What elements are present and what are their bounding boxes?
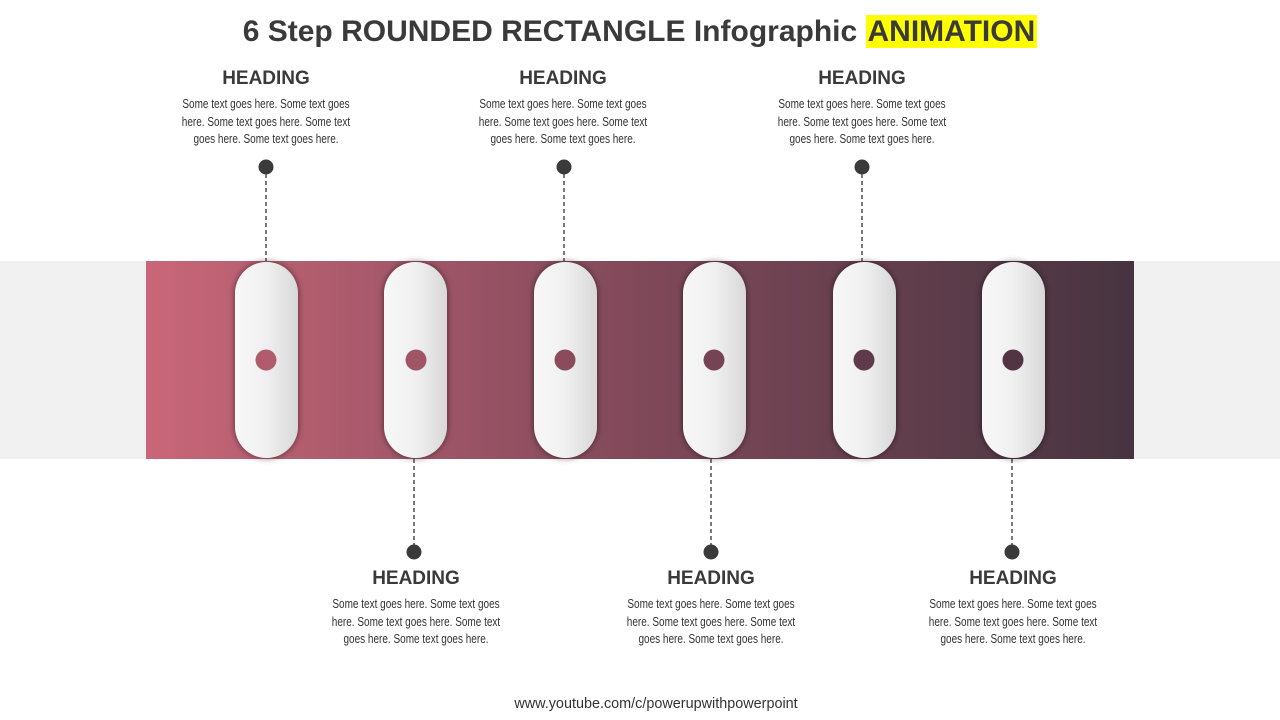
- text block 5: Some text goes here. Some text goes: [778, 97, 946, 111]
- pill 1: [235, 262, 298, 458]
- text block 4: here. Some text goes here. Some text: [627, 615, 795, 629]
- text block 3: HEADING: [519, 68, 607, 89]
- pill 5: [833, 262, 896, 458]
- text block 3: goes here. Some text goes here.: [490, 132, 636, 146]
- text block 1: Some text goes here. Some text goes: [182, 97, 350, 111]
- text block 1: HEADING: [222, 68, 310, 89]
- text block 4: goes here. Some text goes here.: [638, 632, 784, 646]
- footer url: www.youtube.com/c/powerupwithpowerpoint: [514, 695, 798, 712]
- text block 2: HEADING: [372, 568, 460, 589]
- text block 3: here. Some text goes here. Some text: [479, 115, 647, 129]
- pill 4: [683, 262, 746, 458]
- text block 6: goes here. Some text goes here.: [940, 632, 1086, 646]
- text block 1: [182, 68, 350, 146]
- text block 2: here. Some text goes here. Some text: [332, 615, 500, 629]
- text block 2: Some text goes here. Some text goes: [332, 597, 500, 611]
- text block 4: [627, 568, 796, 646]
- text block 1: here. Some text goes here. Some text: [182, 115, 350, 129]
- pill 3: [534, 262, 597, 458]
- text block 4: HEADING: [667, 568, 755, 589]
- text block 6: Some text goes here. Some text goes: [929, 597, 1097, 611]
- text block 2: [332, 568, 500, 646]
- text block 6: [929, 568, 1098, 646]
- text block 2: goes here. Some text goes here.: [343, 632, 489, 646]
- text block 5: [778, 68, 946, 146]
- title: 6 Step ROUNDED RECTANGLE Infographic ANIMATION: [243, 15, 1035, 48]
- text block 5: here. Some text goes here. Some text: [778, 115, 946, 129]
- text block 5: HEADING: [818, 68, 906, 89]
- pill 6: [982, 262, 1045, 458]
- text block 6: HEADING: [969, 568, 1057, 589]
- text block 3: Some text goes here. Some text goes: [479, 97, 647, 111]
- text block 4: Some text goes here. Some text goes: [627, 597, 795, 611]
- pill 2: [384, 262, 447, 458]
- text block 5: goes here. Some text goes here.: [789, 132, 935, 146]
- text block 6: here. Some text goes here. Some text: [929, 615, 1097, 629]
- text block 3: [479, 68, 648, 146]
- text block 1: goes here. Some text goes here.: [193, 132, 339, 146]
